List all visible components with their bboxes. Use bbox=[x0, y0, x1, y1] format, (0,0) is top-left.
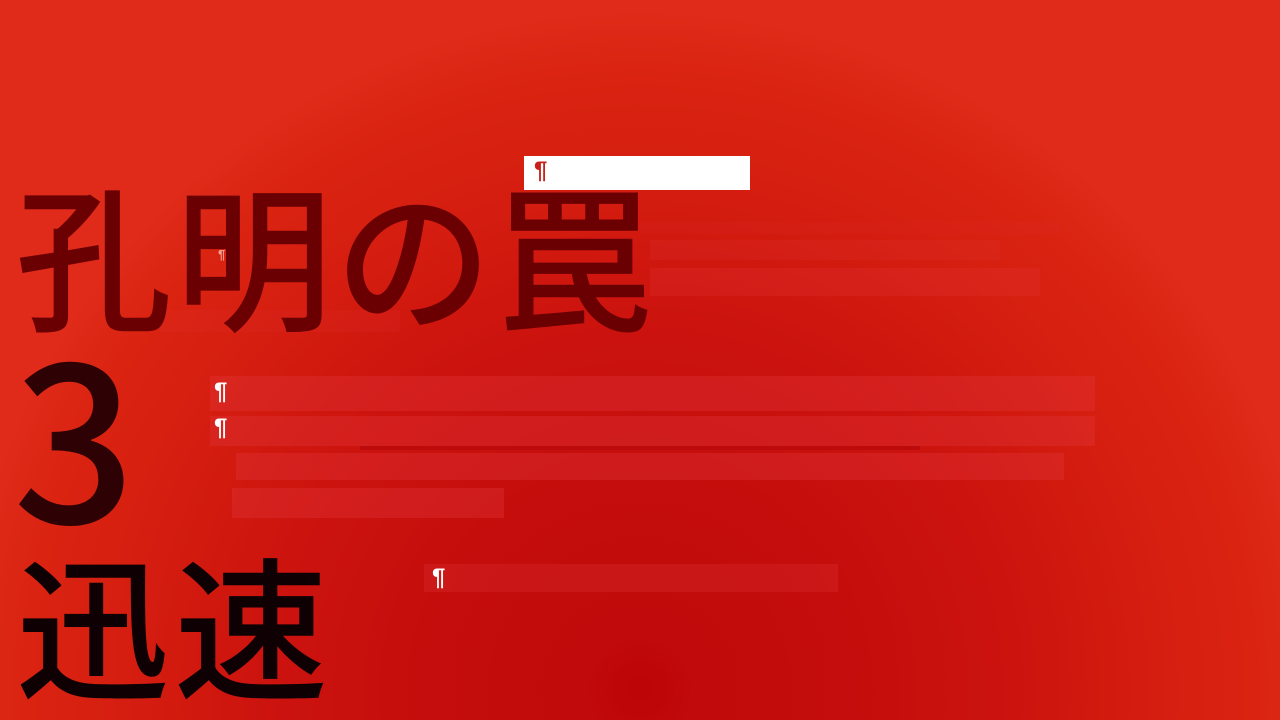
pilcrow in white box: ¶ bbox=[534, 157, 547, 184]
pilcrow line 1: ¶ bbox=[214, 378, 227, 405]
pilcrow line 2: ¶ bbox=[214, 414, 227, 441]
pilcrow line 3: ¶ bbox=[432, 564, 445, 591]
white label box bbox=[524, 156, 750, 190]
title: 孔明の罠: 孔明の罠 bbox=[15, 138, 655, 365]
small pilcrow on title: ¶ bbox=[218, 247, 225, 262]
big number 3: 3 bbox=[13, 274, 136, 585]
